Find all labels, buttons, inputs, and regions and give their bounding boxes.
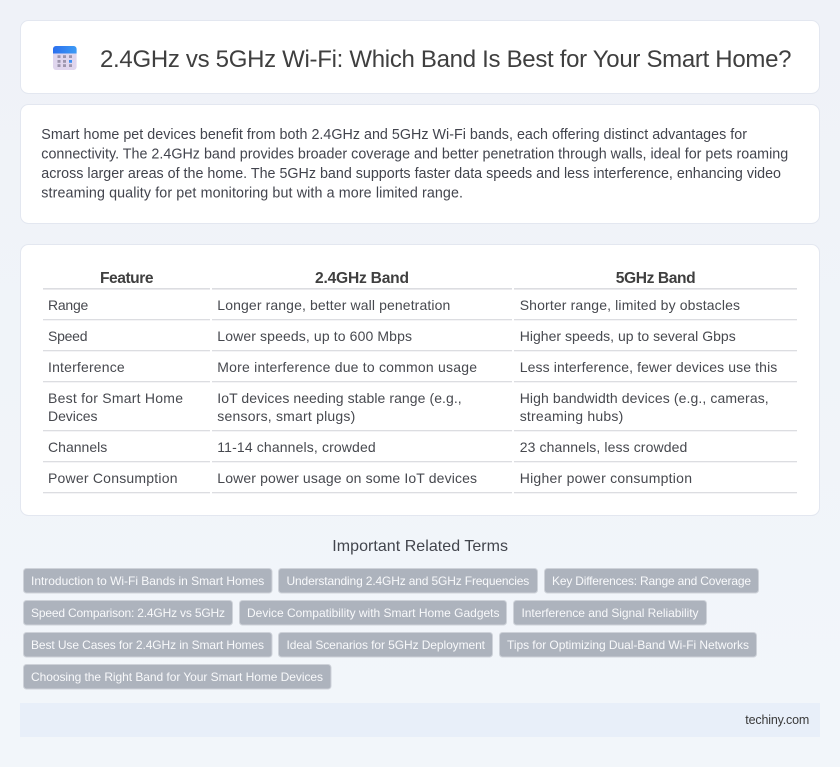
panel: comparison table [20, 244, 820, 516]
table row: channels: 23 channels, less crowded [520, 439, 687, 455]
table row: speed: Lower speeds, up to 600 Mbps [217, 328, 412, 344]
text block: introduction paragraph: streaming quality for pet monitoring but with a more limited range. [41, 186, 463, 202]
tag [24, 568, 272, 593]
table header row: 2.4GHz Band [315, 270, 409, 287]
table row: range: Longer range, better wall penetration [217, 297, 450, 313]
heading: important related terms: Important Related Terms [332, 538, 508, 555]
icon: calendar [53, 46, 77, 70]
table row: channels: 11-14 channels, crowded [217, 439, 376, 455]
table row: interference: More interference due to common usage [217, 359, 477, 375]
tag: Best Use Cases for 2.4GHz in Smart Homes [31, 638, 264, 652]
table row: best for smart home devices: Best for Smart Home [48, 390, 183, 406]
table row: best for smart home devices: sensors, smart plugs) [217, 408, 355, 424]
tag [240, 600, 506, 625]
table header row: 5GHz Band [616, 270, 696, 287]
text block: introduction paragraph: connectivity. The 2.4GHz band provides broader coverage and better penetration through walls, ideal for pets roaming [41, 146, 788, 162]
table row: interference: Interference [48, 359, 125, 375]
tag: Key Differences: Range and Coverage [552, 574, 751, 588]
table row: best for smart home devices: High bandwidth devices (e.g., cameras, [520, 390, 769, 406]
table row: channels: Channels [48, 439, 107, 455]
table row: interference: Less interference, fewer devices use this [520, 359, 777, 375]
footer source text: techiny.com [745, 713, 809, 727]
tag: Understanding 2.4GHz and 5GHz Frequencies [286, 574, 529, 588]
table row: best for smart home devices [48, 390, 769, 424]
tag: Ideal Scenarios for 5GHz Deployment [286, 638, 486, 652]
tag [24, 600, 232, 625]
table row: range: Range [48, 297, 89, 313]
tag: Interference and Signal Reliability [522, 606, 698, 620]
tag list: related terms [24, 568, 758, 689]
table row: best for smart home devices: IoT devices needing stable range (e.g., [217, 390, 462, 406]
title: 2.4GHz vs 5GHz Wi-Fi: Which Band Is Best for Your Smart Home? [100, 46, 792, 73]
tag: Introduction to Wi-Fi Bands in Smart Homes [31, 574, 264, 588]
panel: introduction [20, 104, 820, 224]
footer [20, 703, 820, 737]
table row: power consumption: Lower power usage on some IoT devices [217, 470, 477, 486]
panel: title header [20, 20, 820, 94]
text block: introduction paragraph [41, 127, 788, 202]
tag [514, 600, 706, 625]
tag: Speed Comparison: 2.4GHz vs 5GHz [31, 606, 225, 620]
table header row: Feature [100, 270, 154, 287]
tag: Tips for Optimizing Dual-Band Wi-Fi Networks [507, 638, 749, 652]
table row: interference [48, 359, 777, 375]
tag [544, 568, 758, 593]
table row: power consumption [48, 470, 692, 486]
tag [24, 664, 331, 689]
table row: power consumption: Higher power consumption [520, 470, 692, 486]
tag: Device Compatibility with Smart Home Gadgets [247, 606, 500, 620]
table row: channels [48, 439, 687, 455]
table row: best for smart home devices: streaming hubs) [520, 408, 623, 424]
text block: introduction paragraph: across larger areas of the home. The 5GHz band supports faster data speeds and less interference, enhancing video [41, 166, 781, 182]
table row: speed: Higher speeds, up to several Gbps [520, 328, 736, 344]
tag [24, 632, 272, 657]
text block: introduction paragraph: Smart home pet devices benefit from both 2.4GHz and 5GHz Wi-Fi bands, each offering distinct advantages for [41, 127, 747, 143]
tag [278, 632, 492, 657]
table row: range: Shorter range, limited by obstacles [520, 297, 740, 313]
tag: Choosing the Right Band for Your Smart Home Devices [31, 670, 323, 684]
table row: speed [48, 328, 736, 344]
table header row [100, 270, 696, 287]
table row: power consumption: Power Consumption [48, 470, 178, 486]
tag [500, 632, 756, 657]
tag [278, 568, 538, 593]
table row: range [48, 297, 740, 313]
table row: best for smart home devices: Devices [48, 408, 98, 424]
table row: speed: Speed [48, 328, 88, 344]
